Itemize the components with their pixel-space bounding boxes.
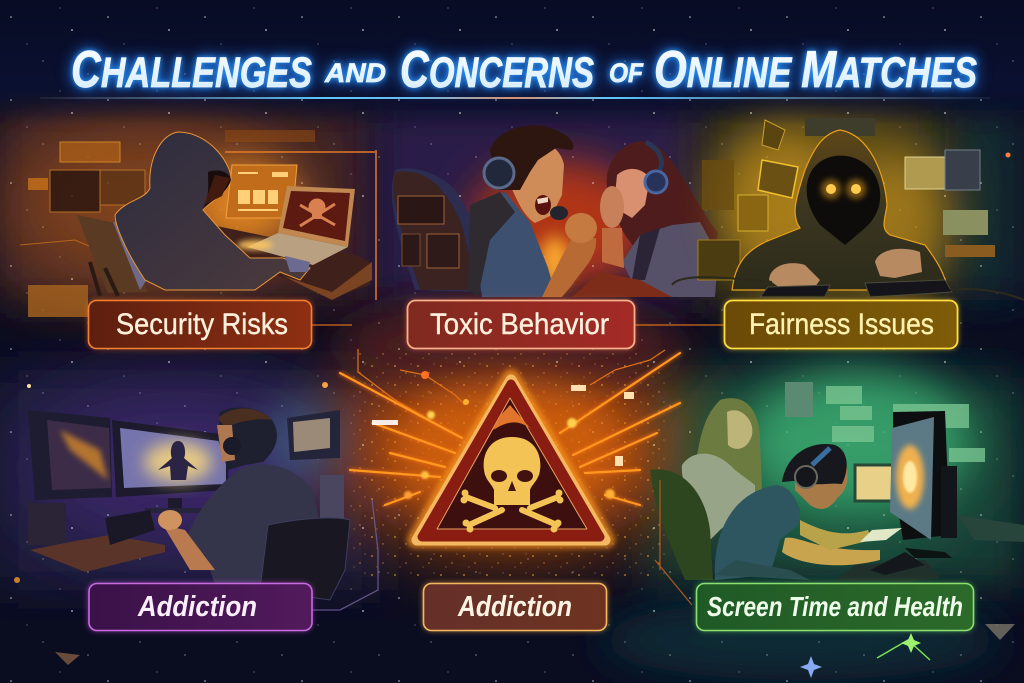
- monitor with burst: [890, 411, 957, 558]
- panel: security risks scene: [20, 130, 376, 317]
- left monitor: [28, 410, 112, 500]
- chair: [77, 215, 148, 293]
- title: ONLINE MATCHES: [654, 41, 977, 99]
- green screens: [750, 375, 985, 505]
- green chair: [650, 469, 713, 580]
- circuit lines and sparks: [310, 325, 724, 610]
- title: [71, 41, 977, 99]
- decorative constellation and stars: [14, 152, 1015, 678]
- panel: toxic behavior scene: [392, 125, 718, 297]
- title: AND: [324, 58, 386, 88]
- label: Addiction (left): Addiction: [137, 591, 257, 623]
- background data screens: [20, 130, 376, 317]
- PC towers and mixer: [28, 503, 66, 545]
- gold screens: [698, 118, 995, 295]
- label: Addiction (left): [88, 583, 312, 631]
- office chair: [260, 518, 350, 600]
- desk: [210, 225, 370, 298]
- boy with headphones: [715, 444, 902, 580]
- label: Security Risks: Security Risks: [116, 308, 288, 341]
- gaming chair: [392, 168, 512, 292]
- label: Addiction (centre): Addiction: [457, 591, 572, 623]
- skull icon: [460, 437, 564, 532]
- panel: addiction gamer scene: [28, 400, 350, 600]
- desk: [30, 535, 165, 572]
- hooded figure with glowing eyes: [732, 130, 948, 290]
- label: Toxic Behavior: Toxic Behavior: [430, 308, 609, 341]
- label: Addiction (centre): [423, 583, 607, 631]
- standing woman: [682, 398, 762, 540]
- label: Screen Time and Health: [696, 583, 974, 631]
- woman with headset: [572, 141, 718, 297]
- warning burst rays: [340, 353, 680, 525]
- desk and keyboard: [835, 560, 940, 582]
- panel: screen time scene: [650, 375, 1024, 582]
- label: Fairness Issues: Fairness Issues: [749, 308, 934, 341]
- man from behind: [158, 407, 320, 585]
- right desk: [957, 515, 1024, 542]
- label: Security Risks: [88, 300, 312, 349]
- title: OF: [609, 58, 644, 88]
- small right monitor: [260, 400, 340, 480]
- glowing screen behind laptop: [190, 163, 300, 247]
- panel: fairness issues scene: [672, 118, 1024, 300]
- warning triangle with skull and crossbones: [415, 377, 607, 540]
- hooded figure: [115, 132, 310, 290]
- title: CONCERNS: [400, 41, 594, 99]
- shouting man: [468, 125, 597, 297]
- title: CHALLENGES: [71, 41, 312, 99]
- centre monitor: [112, 420, 228, 513]
- keyboards: [760, 285, 830, 297]
- label: Screen Time and Health: Screen Time and Health: [707, 591, 963, 622]
- label: Fairness Issues: [724, 300, 958, 349]
- laptop with skull: [237, 186, 355, 265]
- label: Toxic Behavior: [407, 300, 635, 349]
